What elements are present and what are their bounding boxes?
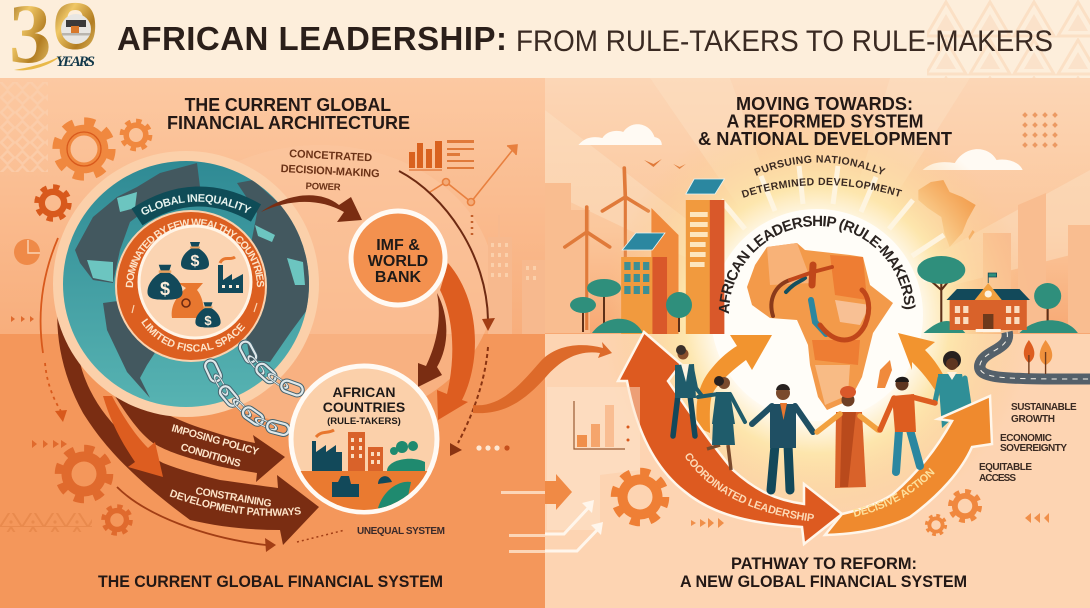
gears, lower right: [926, 492, 980, 534]
center: money bags and factory: [139, 226, 251, 338]
circle: African countries: COUNTRIES: [323, 399, 405, 415]
circle: IMF and World Bank: BANK: [375, 269, 422, 286]
curved label: pursuing nationally determined development: PURSUING NATIONALLY: [754, 155, 886, 176]
trees left of disc: [570, 279, 692, 333]
small triangles, left: [11, 316, 67, 448]
icon: pie chart: [14, 239, 40, 265]
heading: pathway to reform: PATHWAY TO REFORM:: [731, 554, 917, 573]
arrow: connecting left to right: [473, 342, 612, 413]
road: [980, 332, 1090, 379]
title: [117, 20, 1053, 58]
heading: pathway to reform: [680, 554, 967, 591]
wind turbines: [565, 168, 648, 330]
banner: global inequality: GLOBAL INEQUALITY: [141, 194, 252, 215]
header pattern: [927, 0, 1090, 78]
person 3: [752, 384, 813, 490]
title: FROM RULE-TAKERS TO RULE-MAKERS: [516, 25, 1053, 58]
circle: IMF and World Bank: [351, 211, 445, 305]
arrow labels: policy and pathways: DEVELOPMENT PATHWAYS: [170, 489, 301, 516]
curved label: decisive action: DECISIVE ACTION: [853, 468, 935, 517]
labels: outcomes: EQUITABLE: [979, 462, 1032, 473]
orange ring with curved labels: DOMINATED BY FEW WEALTHY COUNTRIES: [126, 218, 264, 288]
right panel: sun rays: [545, 78, 1090, 320]
left tribal pattern: [0, 82, 48, 172]
clouds: [578, 124, 1023, 170]
curved label: African leadership (rule-makers): AFRICAN LEADERSHIP (RULE-MAKERS): [718, 216, 916, 314]
chain: upper: [238, 340, 304, 397]
circle: African countries: AFRICAN: [332, 384, 396, 400]
circle: African countries: [286, 366, 446, 516]
right lower: light panel: [547, 387, 640, 530]
kente pattern, lower left: [0, 513, 92, 532]
person 6: [935, 351, 970, 428]
circle: African countries: (RULE-TAKERS): [327, 416, 401, 427]
center: money bags and factory: $: [191, 253, 200, 270]
arrow: decisive action: [825, 396, 992, 535]
labels: outcomes: [979, 402, 1077, 484]
decoration: dots: [476, 445, 510, 451]
arrow: small orange: [103, 396, 163, 477]
towers with solar panels: [621, 179, 724, 334]
background: left lower panel: [0, 334, 545, 608]
heading: current global financial system: THE CURRENT GLOBAL FINANCIAL SYSTEM: [98, 572, 443, 591]
arrow: constraining development pathways: [57, 285, 319, 545]
logo: 30 years: [9, 0, 99, 81]
arrow labels: policy and pathways: CONDITIONS: [179, 441, 242, 470]
gear, lower center: [615, 472, 665, 522]
line chart arrow: [430, 145, 517, 236]
small Africa map: [918, 180, 976, 247]
thin arc arrow: right side: [399, 171, 495, 456]
white rising arrows: [545, 500, 603, 551]
globe: [53, 151, 319, 417]
labels: outcomes: SOVEREIGNTY: [1000, 443, 1067, 454]
thin arc arrow: left side: [41, 238, 345, 552]
arrow: dark arc from IMF: [418, 293, 446, 387]
center figure with ribbons: [771, 265, 869, 340]
heading: moving towards: [698, 94, 952, 149]
orange ring with curved labels: LIMITED FISCAL SPACE: [141, 318, 246, 352]
labels: outcomes: SUSTAINABLE: [1011, 402, 1077, 413]
small autumn trees: [1024, 340, 1052, 374]
label: concentrated decision-making power: DECISION-MAKING: [280, 163, 380, 180]
person 1: [673, 345, 702, 436]
icon: bar chart and list: [409, 140, 474, 170]
labels: outcomes: ACCESS: [979, 473, 1016, 484]
center: money bags and factory: $: [204, 313, 212, 328]
gears cluster, upper left: [37, 121, 150, 219]
heading: current global financial architecture: THE CURRENT GLOBAL: [185, 95, 391, 115]
person 4: [817, 386, 878, 488]
birds: [644, 159, 686, 169]
label: concentrated decision-making power: POWER: [305, 181, 341, 193]
inner arrows: [696, 333, 952, 433]
background: header band: [0, 0, 1090, 78]
background: right lower panel: [545, 334, 1090, 608]
arrow: orange chevron: [545, 474, 572, 510]
white disc: [711, 209, 923, 421]
orange ring with curved labels: [115, 210, 267, 362]
arrow: coordinated leadership: [618, 332, 842, 544]
banner: global inequality: [132, 186, 261, 226]
arrow: orange arc from IMF: [437, 263, 475, 420]
heading: moving towards: A REFORMED SYSTEM: [726, 112, 924, 132]
small direction marks: [691, 513, 1049, 528]
background: right upper panel: [545, 78, 1090, 334]
gears, lower left: [59, 449, 130, 534]
arrow labels: policy and pathways: IMPOSING POLICY: [170, 422, 260, 458]
curved label: pursuing nationally determined development: DETERMINED DEVELOPMENT: [742, 178, 902, 198]
left lighter swoosh: [145, 145, 495, 425]
title: AFRICAN LEADERSHIP:: [117, 20, 507, 57]
labels: outcomes: GROWTH: [1011, 414, 1055, 425]
Africa map at center: [747, 243, 893, 410]
heading: current global financial architecture: [167, 95, 410, 133]
background: left upper panel: [0, 78, 545, 334]
heading: pathway to reform: A NEW GLOBAL FINANCIAL SYSTEM: [680, 572, 967, 591]
person 5: [880, 377, 935, 472]
right panel: faint city: [545, 183, 1090, 333]
heading: moving towards: MOVING TOWARDS:: [736, 94, 913, 114]
labels: outcomes: ECONOMIC: [1000, 433, 1052, 444]
logo: 30 years: YEARS: [56, 54, 95, 70]
curved label: coordinated leadership: COORDINATED LEADERSHIP: [686, 453, 814, 522]
heading: current global financial architecture: FINANCIAL ARCHITECTURE: [167, 113, 410, 133]
decoration: dot grid: [1020, 110, 1060, 150]
label: concentrated decision-making power: [280, 148, 380, 193]
circle: IMF and World Bank: WORLD: [368, 253, 428, 270]
label: concentrated decision-making power: CONCETRATED: [289, 148, 372, 164]
arrow: imposing policy conditions: [113, 393, 285, 482]
yellow radial glow: [602, 105, 1032, 535]
label: unequal system: UNEQUAL SYSTEM: [357, 526, 445, 537]
mini bar chart: [574, 401, 630, 449]
arrow labels: policy and pathways: CONSTRAINING: [194, 485, 272, 510]
arrow: to IMF and World Bank: [261, 195, 362, 222]
rays around the disc: [687, 166, 960, 280]
person 2: [698, 376, 745, 470]
arrow labels: policy and pathways: [170, 422, 301, 516]
faint city, left panel: [488, 215, 545, 334]
heading: moving towards: & NATIONAL DEVELOPMENT: [698, 129, 952, 149]
trees and school, right of disc: [917, 256, 1078, 333]
decoration: white stripes: [501, 491, 545, 553]
center: money bags and factory: $: [160, 279, 170, 299]
circle: IMF and World Bank: IMF &: [376, 237, 420, 254]
curved label: pursuing nationally determined development: [742, 155, 902, 198]
chain: lower: [203, 359, 290, 436]
